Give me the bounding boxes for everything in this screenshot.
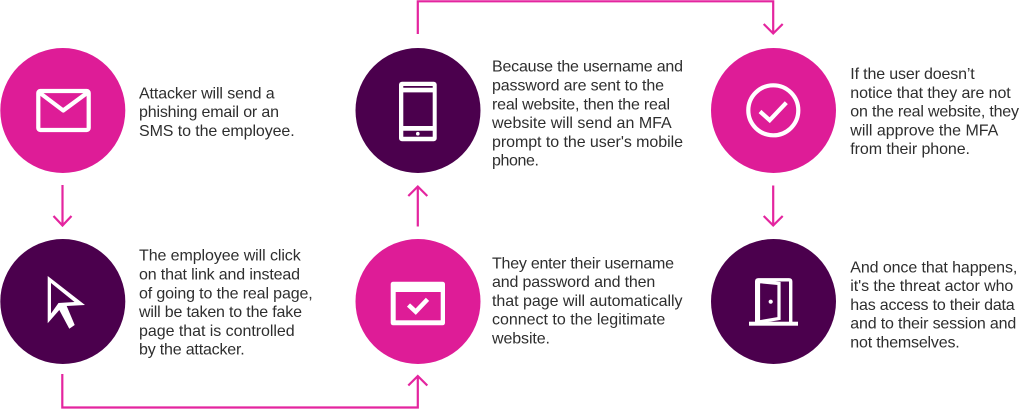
step 1 text [139, 85, 295, 140]
step 3 text: website will send an MFA [491, 115, 672, 132]
step 3 circle [356, 48, 480, 173]
step 3 text: real website, then the real [492, 96, 670, 113]
step 6 text: not themselves. [850, 334, 960, 352]
step 2 circle [0, 239, 125, 364]
step 1 text: Attacker will send a [139, 85, 275, 102]
step 5: approve MFA [711, 48, 1019, 173]
arrow: step 1 to step 2 [54, 185, 72, 226]
step 4 text: connect to the legitimate [492, 312, 665, 329]
step 6 text: and to their session and [850, 316, 1016, 333]
step 4 text: that page will automatically [492, 293, 682, 310]
step 2 text: of going to the real page, [139, 285, 313, 302]
icon: check in circle [748, 85, 798, 135]
arrow: step 3 to step 5 [418, 1, 783, 34]
step 5 text: will approve the MFA [849, 122, 999, 139]
step 5 text: on the real website, they [850, 104, 1019, 121]
icon: window with check [391, 282, 445, 325]
arrow: step 2 to step 4 [62, 374, 427, 408]
icon: mobile phone [399, 82, 437, 141]
icon: cursor [48, 276, 85, 329]
arrow: step 4 to step 3 [408, 186, 427, 226]
step 4: enter credentials [356, 239, 682, 364]
step 1: phishing email [0, 48, 295, 173]
icon: envelope [38, 91, 89, 130]
step 3 text: Because the username and [492, 59, 683, 76]
step 6 text [850, 259, 1017, 352]
step 2 text: on that link and instead [139, 266, 300, 284]
step 6 text: it's the threat actor who [850, 278, 1013, 295]
step 2 text: The employee will click [139, 248, 302, 265]
step 6 text: has access to their data [850, 297, 1015, 314]
step 2 text [138, 248, 313, 359]
step 1 text: phishing email or an [139, 104, 279, 121]
step 5 text: If the user doesn’t [850, 66, 975, 83]
arrow: step 5 to step 6 [764, 186, 783, 226]
step 2: fake page [0, 239, 313, 364]
step 2 text: by the attacker. [139, 342, 245, 359]
step 4 circle [356, 239, 480, 364]
step 2 text: page that is controlled [139, 323, 295, 340]
step 4 text: website. [491, 330, 550, 348]
step 6 text: And once that happens, [850, 259, 1017, 276]
step 3: MFA prompt [356, 48, 683, 173]
step 5 circle [711, 48, 836, 173]
step 5 text [849, 66, 1019, 158]
step 3 text: password are sent to the [492, 78, 664, 94]
step 6 circle [711, 239, 836, 364]
step 2 text: will be taken to the fake [138, 304, 302, 321]
step 5 text: notice that they are not [850, 85, 1011, 102]
step 1 circle [0, 48, 125, 173]
icon: open door [749, 280, 798, 326]
step 4 text: They enter their username [492, 255, 674, 272]
step 4 text: and password and then [492, 274, 655, 291]
step 5 text: from their phone. [850, 141, 970, 158]
step 6: threat actor access [711, 239, 1017, 364]
step 3 text: prompt to the user's mobile [492, 134, 683, 151]
step 1 text: SMS to the employee. [139, 123, 295, 140]
step 3 text: phone. [492, 153, 539, 170]
step 3 text [491, 59, 683, 170]
step 4 text [491, 255, 682, 348]
